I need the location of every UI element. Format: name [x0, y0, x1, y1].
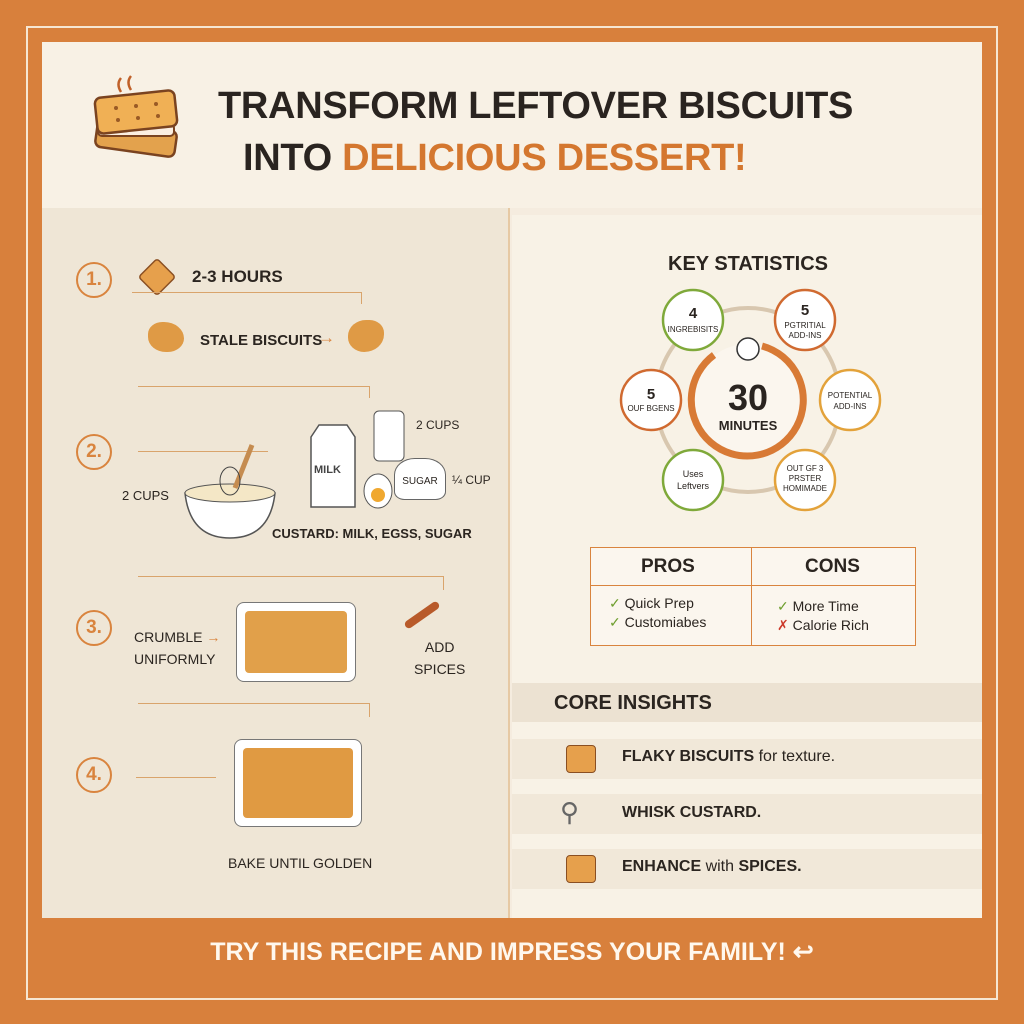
step 3: SPICES: [414, 661, 465, 677]
chart: stats ring: 5: [801, 302, 809, 319]
step 1: 1.: [86, 269, 102, 290]
step 3: [76, 576, 465, 682]
step 4: 4.: [86, 764, 102, 785]
step 2: SUGAR: [402, 476, 438, 487]
pros and cons table: [590, 547, 916, 646]
chart: stats ring: [620, 288, 882, 512]
title: INTO DELICIOUS DESSERT!: [243, 137, 746, 179]
step 4: [76, 703, 372, 871]
step 2: 2 CUPS: [416, 418, 459, 432]
chart: stats ring: POTENTIAL: [828, 391, 873, 400]
chart: stats ring: Uses: [683, 469, 704, 479]
chart: stats ring: OUT GF 3: [787, 464, 824, 473]
core insights: [512, 683, 982, 889]
step 4: BAKE UNTIL GOLDEN: [228, 855, 372, 871]
pros and cons table: ✗ Calorie Rich: [777, 617, 869, 633]
chart: stats ring: 30: [728, 377, 768, 418]
panel: right: [512, 215, 982, 918]
core insights: ENHANCE with SPICES.: [622, 858, 802, 875]
step 1: →: [318, 328, 335, 347]
chart: stats ring: Leftvers: [677, 481, 710, 491]
chart: stats ring: HOMIMADE: [783, 484, 827, 493]
chart: stats ring: 5: [647, 386, 655, 403]
step 2: MILK: [314, 464, 341, 476]
chart: stats ring: ADD-INS: [834, 402, 866, 411]
heading: key statistics: KEY STATISTICS: [668, 253, 828, 275]
title: [218, 85, 853, 179]
chart: stats ring: INGREBISITS: [668, 325, 718, 334]
pros and cons table: CONS: [805, 556, 860, 577]
step 1: 2-3 HOURS: [192, 267, 283, 286]
title: TRANSFORM LEFTOVER BISCUITS: [218, 85, 853, 127]
icon: biscuit sandwich: [94, 75, 178, 158]
core insights: CORE INSIGHTS: [554, 692, 712, 714]
chart: stats ring: PGTRITIAL: [784, 321, 826, 330]
step 2: [76, 410, 491, 541]
core insights: FLAKY BISCUITS for texture.: [622, 748, 835, 765]
step 2: 2.: [86, 441, 102, 462]
pros and cons table: ✓ Quick Prep: [609, 595, 694, 611]
chart: stats ring: 4: [689, 305, 698, 322]
chart: stats ring: ADD-INS: [789, 331, 821, 340]
step 1: [76, 259, 384, 398]
header: [42, 42, 982, 208]
footer callout: TRY THIS RECIPE AND IMPRESS YOUR FAMILY! ↩: [210, 938, 814, 966]
core insights: ⚲: [560, 797, 579, 827]
pros and cons table: PROS: [641, 556, 695, 577]
step 2: ¼ CUP: [452, 473, 491, 487]
step 3: ADD: [425, 639, 454, 655]
chart: stats ring: MINUTES: [719, 418, 778, 433]
step 3: CRUMBLE →: [134, 629, 220, 645]
core insights: WHISK CUSTARD.: [622, 804, 761, 821]
pros and cons table: ✓ More Time: [777, 598, 859, 614]
pros and cons table: ✓ Customiabes: [609, 614, 706, 630]
step 3: UNIFORMLY: [134, 651, 215, 667]
step 3: 3.: [86, 617, 102, 638]
step 2: CUSTARD: MILK, EGSS, SUGAR: [272, 526, 472, 541]
chart: stats ring: OUF BGENS: [627, 404, 675, 413]
panel: steps: [42, 208, 510, 918]
chart: stats ring: PRSTER: [789, 474, 821, 483]
step 1: STALE BISCUITS: [200, 332, 322, 349]
step 2: 2 CUPS: [122, 488, 169, 503]
